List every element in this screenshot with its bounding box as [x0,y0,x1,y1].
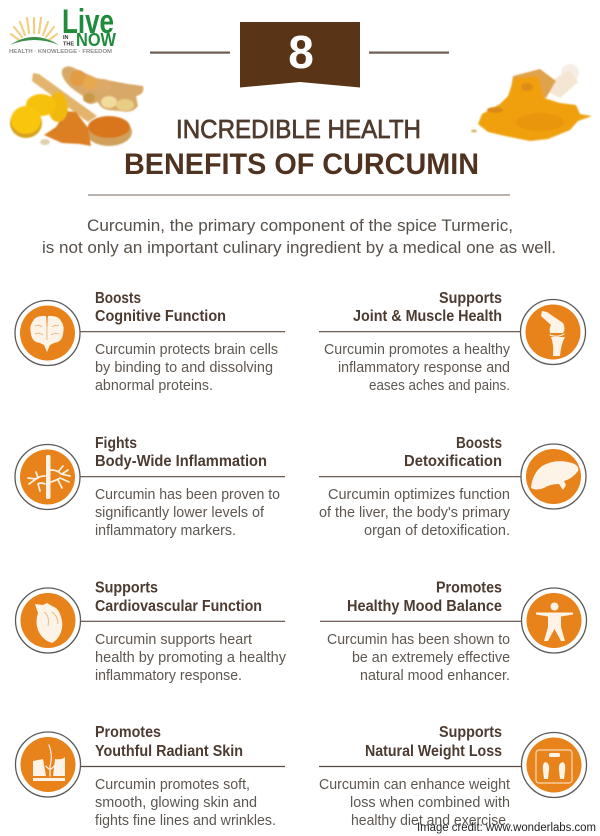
banner with number 8 [240,22,360,88]
logo: Live in the Now: IN [63,35,69,41]
icon: liver [521,444,586,509]
panel: detoxification: Boosts [456,435,502,452]
title [124,114,479,181]
panel: cardiovascular function: inflammatory response. [95,667,242,684]
intro text [42,217,556,257]
panel: youthful radiant skin: Promotes [95,724,161,741]
panel: detoxification: of the liver, the body's primary [319,504,510,521]
photo: turmeric root, slices, spoon and powder [10,66,143,146]
panel: detoxification: organ of detoxification. [364,522,510,539]
panel: natural weight loss: loss when combined with [350,794,510,811]
logo: Live in the Now [9,3,116,55]
panel: youthful radiant skin: Curcumin promotes soft, [95,776,250,793]
panel: detoxification [319,435,586,539]
panel: healthy mood balance: natural mood enhancer. [360,667,510,684]
title: INCREDIBLE HEALTH [176,114,421,144]
panel: joint and muscle health: Supports [439,290,502,307]
divider [88,194,510,196]
logo: Live in the Now: NOW [76,30,116,50]
panel: youthful radiant skin: smooth, glowing skin and [95,794,257,811]
panel: joint and muscle health: eases aches and pains. [369,377,510,394]
panel: body-wide inflammation: Fights [95,435,137,452]
panel: natural weight loss: Curcumin can enhance weight [319,776,511,793]
panel: cognitive function: by binding to and dissolving [95,359,273,376]
panel: cardiovascular function: health by promoting a healthy [95,649,286,666]
icon: person with arms outstretched [522,588,586,653]
panel: cognitive function [15,290,285,394]
logo: Live in the Now: THE [63,42,74,48]
panel: healthy mood balance: Promotes [436,580,502,596]
panel: healthy mood balance: Curcumin has been shown to [327,631,510,648]
panel: youthful radiant skin [16,724,285,829]
banner with number 8: 8 [288,26,314,78]
logo: Live in the Now: HEALTH · KNOWLEDGE · FREEDOM [9,49,112,55]
panel: detoxification: Detoxification [404,453,502,470]
panel: cardiovascular function: Curcumin supports heart [95,631,253,648]
title: BENEFITS OF CURCUMIN [124,148,479,181]
decorative title line right [369,52,449,54]
panel: body-wide inflammation: inflammatory markers. [95,522,236,539]
panel: joint and muscle health [319,290,586,394]
panel: cognitive function: Cognitive Function [95,308,226,325]
panel: cognitive function: Curcumin protects brain cells [95,341,278,358]
panel: healthy mood balance: be an extremely effective [352,649,510,666]
panel: joint and muscle health: Curcumin promotes a healthy [324,341,510,358]
panel: body-wide inflammation: Curcumin has been proven to [95,486,280,503]
panel: body-wide inflammation [15,435,285,539]
panel: joint and muscle health: inflammatory response and [338,359,510,376]
panel: healthy mood balance: Healthy Mood Balance [347,598,502,615]
panel: cardiovascular function: Cardiovascular Function [95,598,262,615]
panel: cognitive function: abnormal proteins. [95,377,213,394]
panel: natural weight loss: Supports [439,724,502,741]
icon: knee joint [520,300,586,364]
icon: heart [16,588,80,653]
icon: inflamed vessel [15,444,80,510]
intro text: Curcumin, the primary component of the spice Turmeric, [87,217,513,235]
panel: joint and muscle health: Joint & Muscle Health [353,308,502,325]
panel: cognitive function: Boosts [95,290,141,307]
logo: Live in the Now: Live [62,3,114,41]
icon: skin and hair follicle [16,732,80,797]
panel: cardiovascular function [16,580,286,684]
panel: natural weight loss [319,724,586,829]
panel: natural weight loss: healthy diet and exercise. [351,812,510,829]
photo: turmeric powder pile with scoop [471,64,592,141]
icon: bathroom scale [522,732,586,798]
image credit: Image credit: www.wonderlabs.com [417,822,596,834]
panel: detoxification: Curcumin optimizes function [328,486,510,503]
panel: natural weight loss: Natural Weight Loss [365,743,502,760]
intro text: is not only an important culinary ingredient by a medical one as well. [42,239,556,257]
decorative title line left [150,52,230,54]
icon: brain [15,300,80,366]
panel: healthy mood balance [320,580,586,684]
panel: cardiovascular function: Supports [95,580,158,596]
panel: body-wide inflammation: Body-Wide Inflammation [95,453,267,470]
panel: youthful radiant skin: Youthful Radiant Skin [95,743,243,760]
panel: youthful radiant skin: fights fine lines and wrinkles. [95,812,276,829]
panel: body-wide inflammation: significantly lower levels of [95,504,265,521]
